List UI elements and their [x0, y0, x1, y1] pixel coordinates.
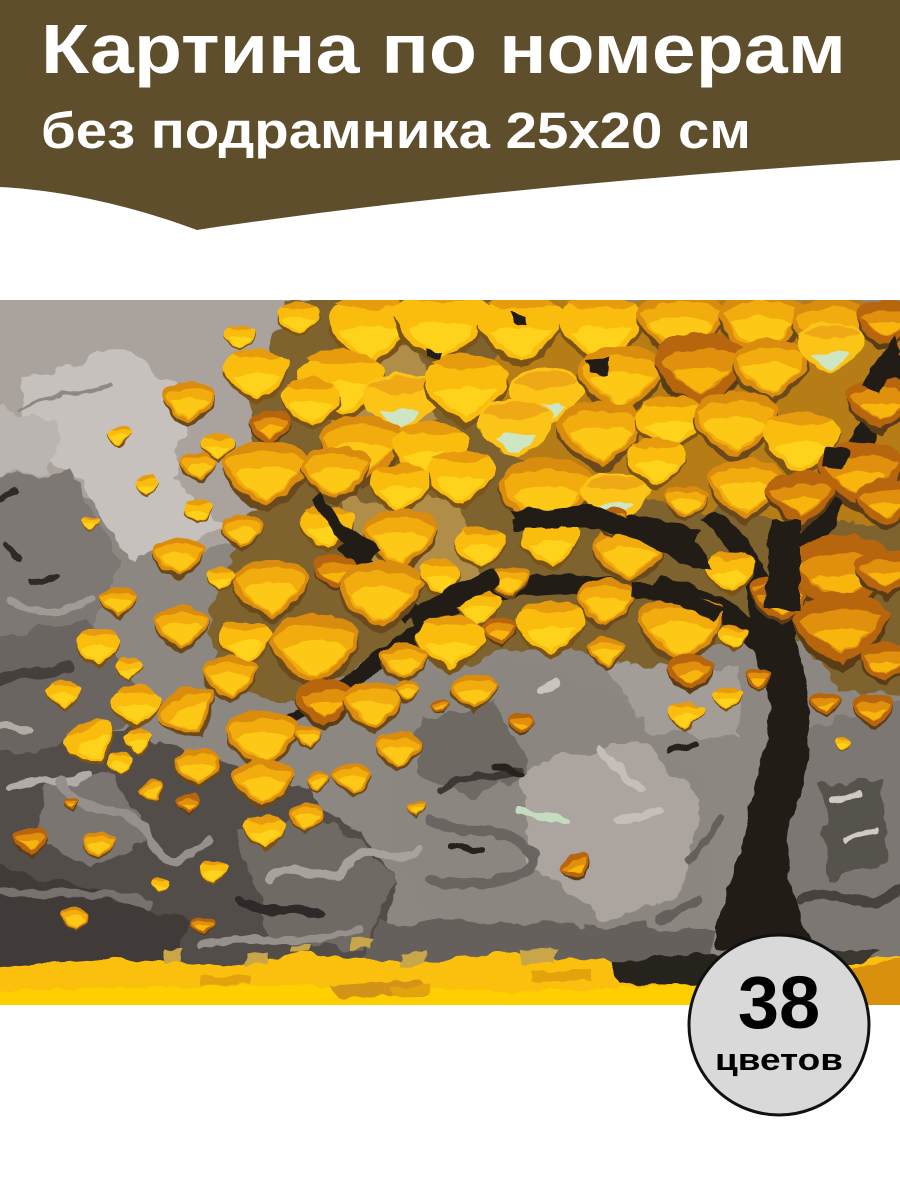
header banner: [0, 0, 900, 230]
leaves: lower crown layer: [203, 614, 714, 734]
leaves: far crown layer: [249, 286, 900, 531]
leaves: scattered left: [12, 324, 426, 936]
number of colours: 38: [738, 961, 820, 1044]
fallen leaves on ground: [0, 936, 900, 1005]
autumn leaves: [12, 286, 900, 936]
leaves: middle crown layer: [223, 438, 900, 686]
subtitle: без подрамника 25х20 см: [41, 102, 751, 159]
leaves: scattered right: [432, 625, 895, 888]
colour count badge: [689, 935, 869, 1115]
colours label: цветов: [715, 1042, 843, 1077]
branch fragments between leaves: [312, 312, 900, 628]
title: Картина по номерам: [41, 10, 846, 88]
painting: autumn tree: [0, 286, 900, 1015]
painted grey background: [0, 290, 900, 970]
tree crown shadow mass: [210, 300, 900, 700]
background brush strokes: [0, 385, 900, 945]
tree trunk and branches: [280, 350, 900, 950]
